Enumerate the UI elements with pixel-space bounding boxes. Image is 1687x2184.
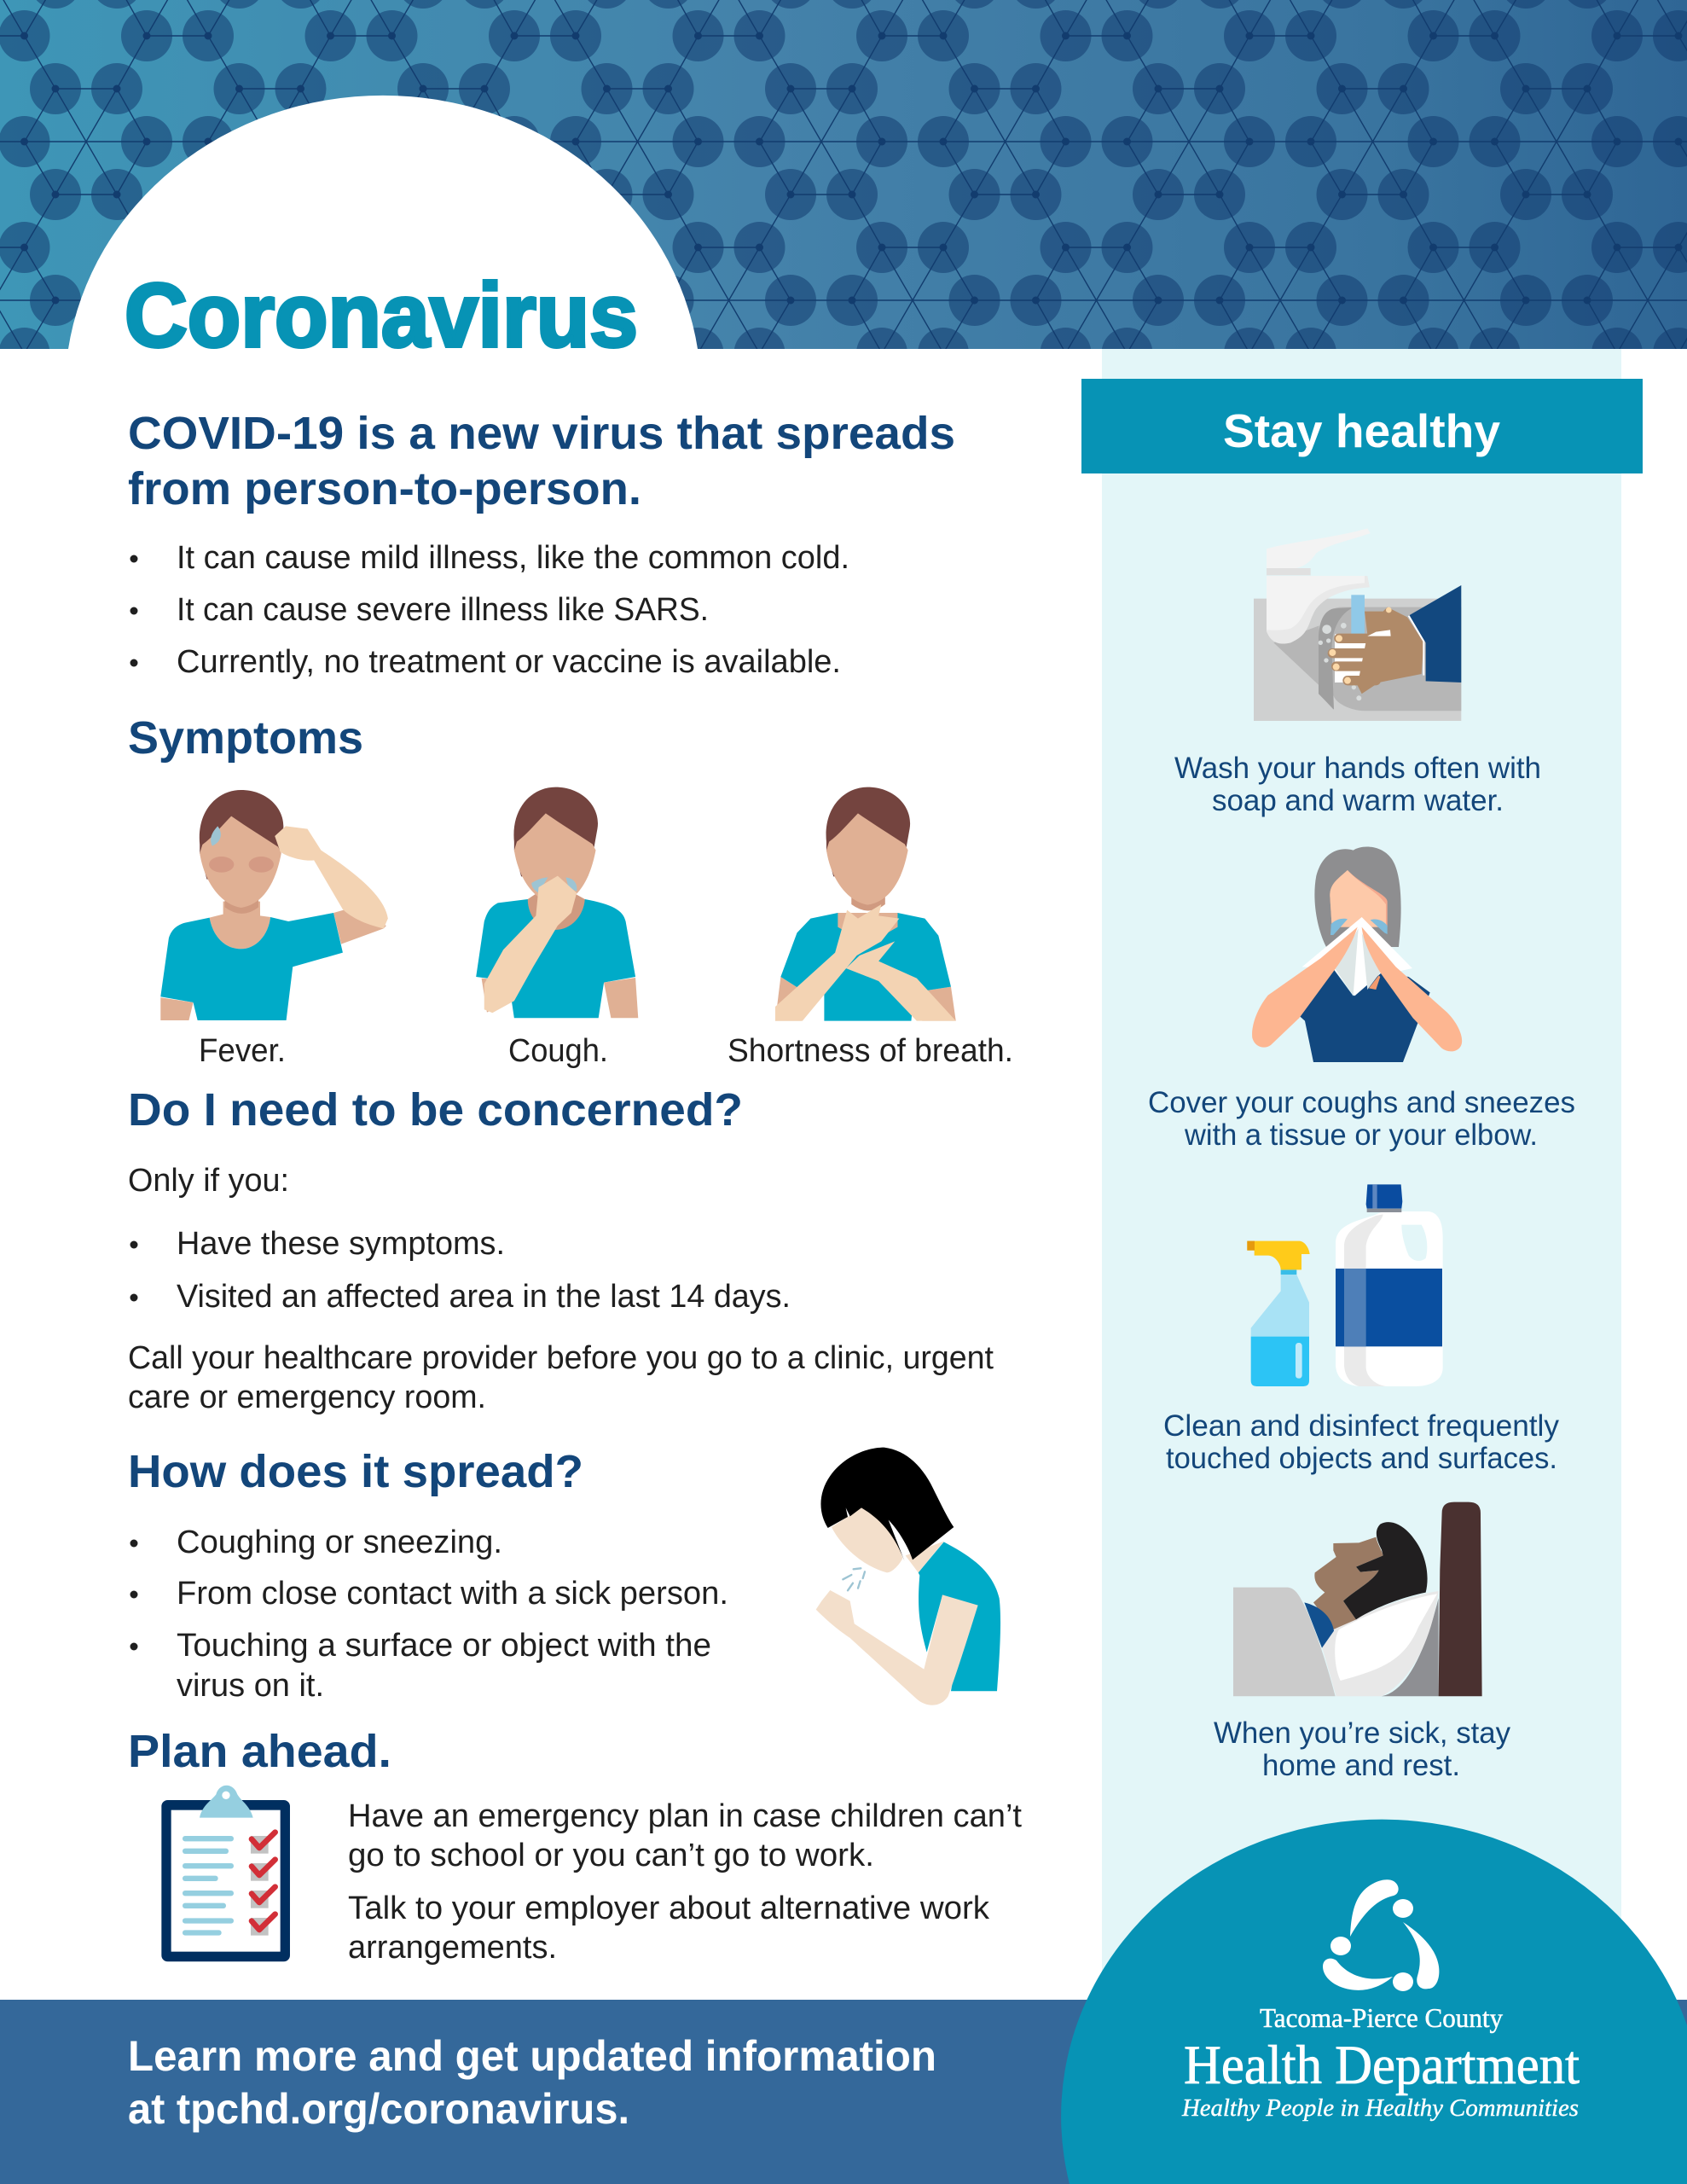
panel: stay healthy background — [1102, 349, 1621, 2000]
symptom labels: Fever. — [199, 1033, 286, 1069]
intro bullet list — [130, 540, 849, 680]
spread bullet list: Coughing or sneezing. — [177, 1525, 502, 1560]
intro bullet list: It can cause severe illness like SARS. — [177, 592, 709, 628]
text block: concern criteria: Only if you: — [128, 1163, 289, 1199]
heading: symptoms: Symptoms — [128, 712, 363, 764]
icon: person resting in bed — [1233, 1502, 1482, 1696]
icon: person sneezing into tissue — [1252, 846, 1462, 1062]
title: Coronavirus — [125, 265, 638, 366]
logo wordmark: Tacoma-Pierce County — [1260, 2002, 1503, 2033]
intro heading — [128, 408, 955, 514]
icon: cleaning bottles — [1247, 1184, 1443, 1386]
footer call to action — [128, 2032, 936, 2133]
caption: clean and disinfect — [1163, 1409, 1559, 1475]
text block: concern criteria: Have these symptoms. — [177, 1226, 505, 1262]
logo wordmark: Healthy People in Healthy Communities — [1181, 2094, 1579, 2122]
text block: plan ahead: Have an emergency plan in case children can’t — [348, 1798, 1022, 1834]
text block: concern criteria: care or emergency room. — [128, 1380, 486, 1415]
caption: wash hands: soap and warm water. — [1212, 784, 1504, 817]
text block: concern criteria: Call your healthcare provider before you go to a clinic, urgent — [128, 1340, 994, 1376]
footer call to action: at tpchd.org/coronavirus. — [128, 2085, 629, 2133]
icon: coughing woman — [816, 1448, 1000, 1705]
icon: clipboard checklist — [161, 1786, 290, 1961]
logo circle — [1061, 1820, 1687, 2184]
icon: cough person — [476, 787, 638, 1018]
text block: plan ahead: go to school or you can’t go to work. — [348, 1838, 874, 1873]
caption: stay home: home and rest. — [1262, 1749, 1460, 1782]
icon: health department logo — [1323, 1879, 1439, 1991]
spread bullet list: From close contact with a sick person. — [177, 1576, 728, 1612]
intro heading: from person-to-person. — [128, 463, 641, 514]
caption: wash hands — [1174, 752, 1541, 817]
symptom labels: Cough. — [508, 1033, 608, 1069]
icon: shortness of breath person — [775, 787, 956, 1021]
caption: stay home — [1214, 1716, 1510, 1782]
footer call to action: Learn more and get updated information — [128, 2032, 936, 2080]
spread bullet list — [130, 1525, 728, 1704]
caption: stay home: When you’re sick, stay — [1214, 1716, 1510, 1750]
spread bullet list: virus on it. — [177, 1668, 324, 1704]
footer band — [0, 2000, 1687, 2184]
intro heading: COVID-19 is a new virus that spreads — [128, 408, 955, 459]
text block: plan ahead: Talk to your employer about alternative work — [348, 1891, 990, 1926]
panel heading: stay healthy: Stay healthy — [1223, 404, 1500, 457]
text block: plan ahead: arrangements. — [348, 1930, 557, 1966]
white arch behind title — [68, 96, 698, 349]
symptom labels — [199, 1033, 1013, 1069]
icon: hand washing — [1254, 528, 1461, 721]
caption: wash hands: Wash your hands often with — [1174, 752, 1541, 785]
text block: plan ahead — [348, 1798, 1022, 1966]
panel heading: stay healthy — [1081, 379, 1643, 473]
logo wordmark — [1181, 2002, 1580, 2122]
spread bullet list: Touching a surface or object with the — [177, 1628, 711, 1664]
text block: concern criteria — [128, 1163, 994, 1415]
heading: plan ahead: Plan ahead. — [128, 1726, 391, 1777]
caption: clean and disinfect: touched objects and surfaces. — [1166, 1442, 1557, 1475]
caption: cover coughs: with a tissue or your elbow. — [1184, 1118, 1538, 1152]
header banner with molecule pattern — [0, 0, 1687, 379]
heading: how does it spread: How does it spread? — [128, 1446, 583, 1497]
caption: clean and disinfect: Clean and disinfect frequently — [1163, 1409, 1559, 1443]
intro bullet list: Currently, no treatment or vaccine is available. — [177, 644, 841, 680]
heading: do I need to be concerned: Do I need to be concerned? — [128, 1084, 743, 1136]
text block: concern criteria: Visited an affected area in the last 14 days. — [177, 1279, 791, 1315]
intro bullet list: It can cause mild illness, like the common cold. — [177, 540, 849, 576]
icon: fever person — [160, 790, 388, 1020]
logo wordmark: Health Department — [1184, 2035, 1580, 2096]
caption: cover coughs — [1148, 1086, 1575, 1152]
symptom labels: Shortness of breath. — [728, 1033, 1013, 1069]
caption: cover coughs: Cover your coughs and sneezes — [1148, 1086, 1575, 1119]
